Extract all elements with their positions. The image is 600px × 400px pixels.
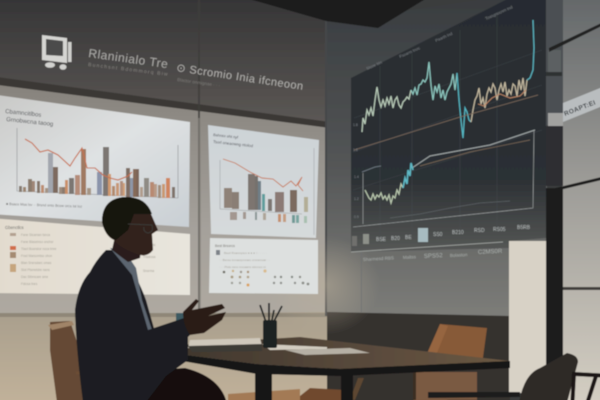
jacket bbox=[75, 250, 188, 400]
bottom labels: Sharmesd RBS bbox=[363, 255, 394, 262]
y axis labels: 1.6 bbox=[353, 148, 358, 152]
table leg bbox=[255, 372, 272, 400]
lower price chart bbox=[362, 130, 535, 218]
subheading text: Bunchsnt Bdommorq Biw bbox=[88, 62, 168, 78]
tile row bbox=[352, 228, 428, 246]
bottom labels: Maltss bbox=[403, 254, 417, 260]
metric labels: RSD bbox=[474, 228, 485, 234]
pen cup bbox=[260, 303, 282, 348]
table edge bbox=[163, 352, 510, 376]
metric labels: B5RB bbox=[517, 225, 531, 231]
panel: center lower icon grid screen bbox=[209, 238, 318, 294]
shirt collar bbox=[110, 248, 152, 330]
table heading: Gbenctlcs bbox=[5, 225, 24, 230]
chart axes bbox=[353, 130, 534, 227]
metric labels: B20 bbox=[391, 236, 400, 242]
chart legend: ■ Bsaco Msa lsv ·· Brsnd onto Bcow orcs Ist Ioz bbox=[6, 202, 83, 209]
chair: seat at the table centre bbox=[300, 378, 364, 400]
grid heading: Best Brsorcs bbox=[215, 244, 235, 248]
wall sign: ROAPT:EI bbox=[563, 99, 597, 118]
panel: dark market dashboard screen bbox=[351, 0, 546, 312]
title banner bbox=[42, 35, 304, 93]
table leg right bbox=[341, 374, 353, 400]
right side wall bbox=[546, 0, 600, 400]
faint header labels: Fsoarm tnoc bbox=[398, 45, 421, 59]
table top bbox=[163, 337, 510, 369]
icon: monitor with mouse bbox=[42, 35, 72, 70]
sleeve cuff bbox=[176, 313, 184, 321]
faint header labels: Stcoe bln bbox=[365, 60, 383, 71]
bottom labels bbox=[363, 249, 503, 262]
grid dots bbox=[223, 269, 309, 286]
table rows: Blcwolnc bbox=[143, 243, 156, 247]
metric labels: B210 bbox=[452, 230, 464, 236]
neck bbox=[112, 232, 142, 262]
chair: presenter chair bbox=[48, 321, 143, 400]
chair: black chair corner bbox=[572, 374, 600, 400]
lower bars bbox=[230, 212, 307, 223]
grid rows: · · · Ptslo ssno rmoaarrs sttnmcc nt bbox=[219, 265, 266, 269]
ceiling bbox=[218, 0, 440, 28]
y axis labels: 1.4 bbox=[354, 175, 359, 179]
bottom labels: C2MS0R bbox=[478, 249, 503, 256]
bars bbox=[19, 147, 175, 198]
upper price chart bbox=[362, 20, 534, 138]
heading text right: ⊙ Scromio Inia ifcneoon bbox=[176, 62, 304, 93]
grid first row bbox=[216, 250, 220, 255]
table bbox=[163, 337, 510, 400]
orange trend line bbox=[223, 159, 303, 191]
y axis labels bbox=[353, 123, 359, 219]
panel: left lower table screen bbox=[0, 218, 190, 295]
table rows bbox=[21, 233, 156, 286]
faint header labels: Paarth lnd bbox=[434, 31, 453, 43]
table rows: Fane Slcaman tsnca bbox=[21, 233, 50, 237]
faint header labels bbox=[365, 4, 513, 71]
floor bbox=[228, 389, 300, 400]
chart title: Bahnsx oht nyf bbox=[213, 133, 239, 140]
table rows: Traatosa bbox=[143, 255, 156, 259]
metric labels: BSE bbox=[376, 237, 387, 243]
chair: dark chair right bbox=[428, 353, 578, 400]
metric labels: BE bbox=[405, 235, 412, 241]
grid lines bbox=[353, 12, 542, 238]
chart title: Cbamncitlbos bbox=[5, 109, 42, 119]
heading text: Rlaninialo Tre bbox=[88, 46, 169, 71]
papers on table bbox=[188, 338, 370, 355]
y axis labels: 1.2 bbox=[354, 197, 359, 201]
y axis labels: 0.9 bbox=[354, 215, 359, 219]
table rows: Dac Stbmcare sme bbox=[21, 275, 48, 279]
table rows: Frad Marsomtso ohon bbox=[21, 254, 52, 258]
wall sign bbox=[563, 84, 600, 122]
cream panel bbox=[509, 241, 546, 393]
table rows: Fane Blaseinso onchsr bbox=[21, 240, 54, 244]
chart subtitle: Tsorl oneaowng ntolod bbox=[213, 139, 253, 148]
legs bbox=[100, 368, 228, 400]
hand bbox=[183, 299, 226, 335]
y axis labels: 1.8 bbox=[353, 123, 358, 127]
grid rows: · · Bsnso tnmaorpmnarc cmnsrnoar · · bbox=[219, 258, 270, 262]
glasses bbox=[128, 224, 152, 233]
metric labels bbox=[376, 225, 531, 243]
table rows: Snorma bbox=[143, 269, 154, 273]
head bbox=[102, 197, 158, 255]
forearm bbox=[148, 318, 190, 364]
table rows: Slot Ptsmetdre nans bbox=[21, 268, 50, 272]
table rows: Fstcsa tnes bbox=[21, 282, 38, 286]
table swatches bbox=[10, 233, 16, 272]
table rows: Tlaot Boonslor ncca tmre bbox=[21, 247, 57, 251]
bottom labels: Bolaston bbox=[450, 252, 468, 258]
presenter silhouette bbox=[75, 197, 228, 400]
orange trend line bbox=[25, 139, 132, 180]
panel: center chart screen bbox=[208, 125, 319, 238]
chart axes bbox=[17, 128, 178, 198]
bottom labels: SPS52 bbox=[424, 253, 443, 260]
subheading text right: Blactor onmignae · · · bbox=[177, 77, 220, 88]
hair bbox=[102, 197, 152, 240]
chart subtitle: Grnobwcna taoog bbox=[6, 117, 54, 128]
grid rows: Bsorl Rsanmpton ● ● ● ○ · · · · · bbox=[224, 251, 267, 255]
metric labels: SS0 bbox=[433, 232, 443, 238]
chart axis bbox=[220, 148, 314, 235]
grid rows bbox=[219, 251, 270, 269]
long reference lines bbox=[354, 95, 538, 150]
faint header labels: Toasgnocnm tnd bbox=[484, 4, 513, 21]
bars bbox=[224, 174, 308, 212]
metric labels: RS05 bbox=[493, 227, 506, 233]
table rows: Blan Srsnsdarc omas bbox=[21, 261, 52, 265]
panel: left bar and line chart screen bbox=[0, 94, 190, 227]
divider bbox=[351, 242, 503, 252]
chair: brown chair behind table bbox=[413, 324, 487, 400]
